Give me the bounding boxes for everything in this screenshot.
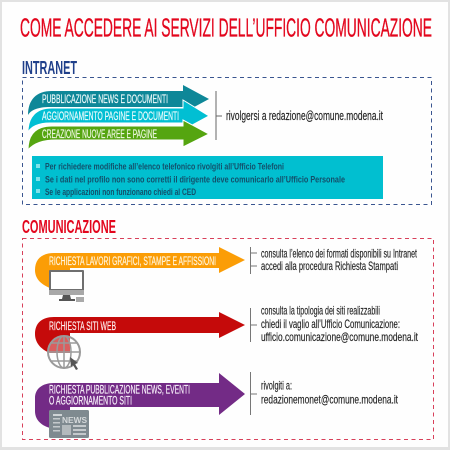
arrow: lavori grafici: RICHIESTA LAVORI GRAFICI, STAMPE E AFFISSIONI: [49, 256, 216, 268]
panel: intranet: [22, 78, 432, 204]
arrow: pubblicazione news eventi: RICHIESTA PUBBLICAZIONE NEWS, EVENTI: [49, 384, 190, 396]
arrow: aggiornamento pagine: AGGIORNAMENTO PAGINE E DOCUMENTI: [42, 111, 179, 123]
arrow: creazione aree: [28, 120, 209, 150]
text: news: [261, 378, 398, 406]
arrow: siti web: [35, 312, 245, 353]
icon: globe: [48, 336, 80, 370]
info box: Per richiedere modifiche all’elenco telefonico rivolgiti all’Ufficio Telefoni: [45, 162, 284, 172]
heading: comunicazione: COMUNICAZIONE: [22, 217, 116, 237]
info box: Se i dati nel profilo non sono corretti il dirigente deve comunicarlo all’Ufficio Personale: [45, 174, 345, 186]
info box: [32, 156, 383, 199]
bracket: lavori grafici: [250, 247, 257, 274]
text: siti web: [261, 304, 418, 344]
arrow: pubblicazione news eventi: [35, 373, 245, 428]
info box: Se le applicazioni non funzionano chiedi al CED: [45, 187, 196, 198]
arrow: lavori grafici: [35, 247, 245, 288]
arrow: creazione aree: CREAZIONE NUOVE AREE E PAGINE: [42, 129, 157, 141]
icon: monitor: [49, 270, 84, 302]
bracket: siti web: [250, 308, 257, 342]
panel: comunicazione: [22, 238, 434, 440]
arrow: pubblicazione news eventi: O AGGIORNAMENTO SITI: [49, 396, 132, 408]
arrow: siti web: RICHIESTA SITI WEB: [49, 321, 116, 333]
icon: newspaper: [49, 410, 89, 438]
text: news: rivolgiti a:: [261, 378, 292, 392]
icon: newspaper: NEWS: [62, 416, 88, 425]
text: lavori grafici: [261, 246, 417, 273]
arrow: aggiornamento pagine: [28, 100, 209, 132]
arrow: pubblicazione news: PUBBLICAZIONE NEWS E DOCUMENTI: [42, 94, 168, 106]
heading: intranet: INTRANET: [22, 58, 77, 78]
bracket: news: [250, 372, 257, 415]
arrow: pubblicazione news: [28, 85, 209, 115]
bracket: [216, 91, 222, 140]
